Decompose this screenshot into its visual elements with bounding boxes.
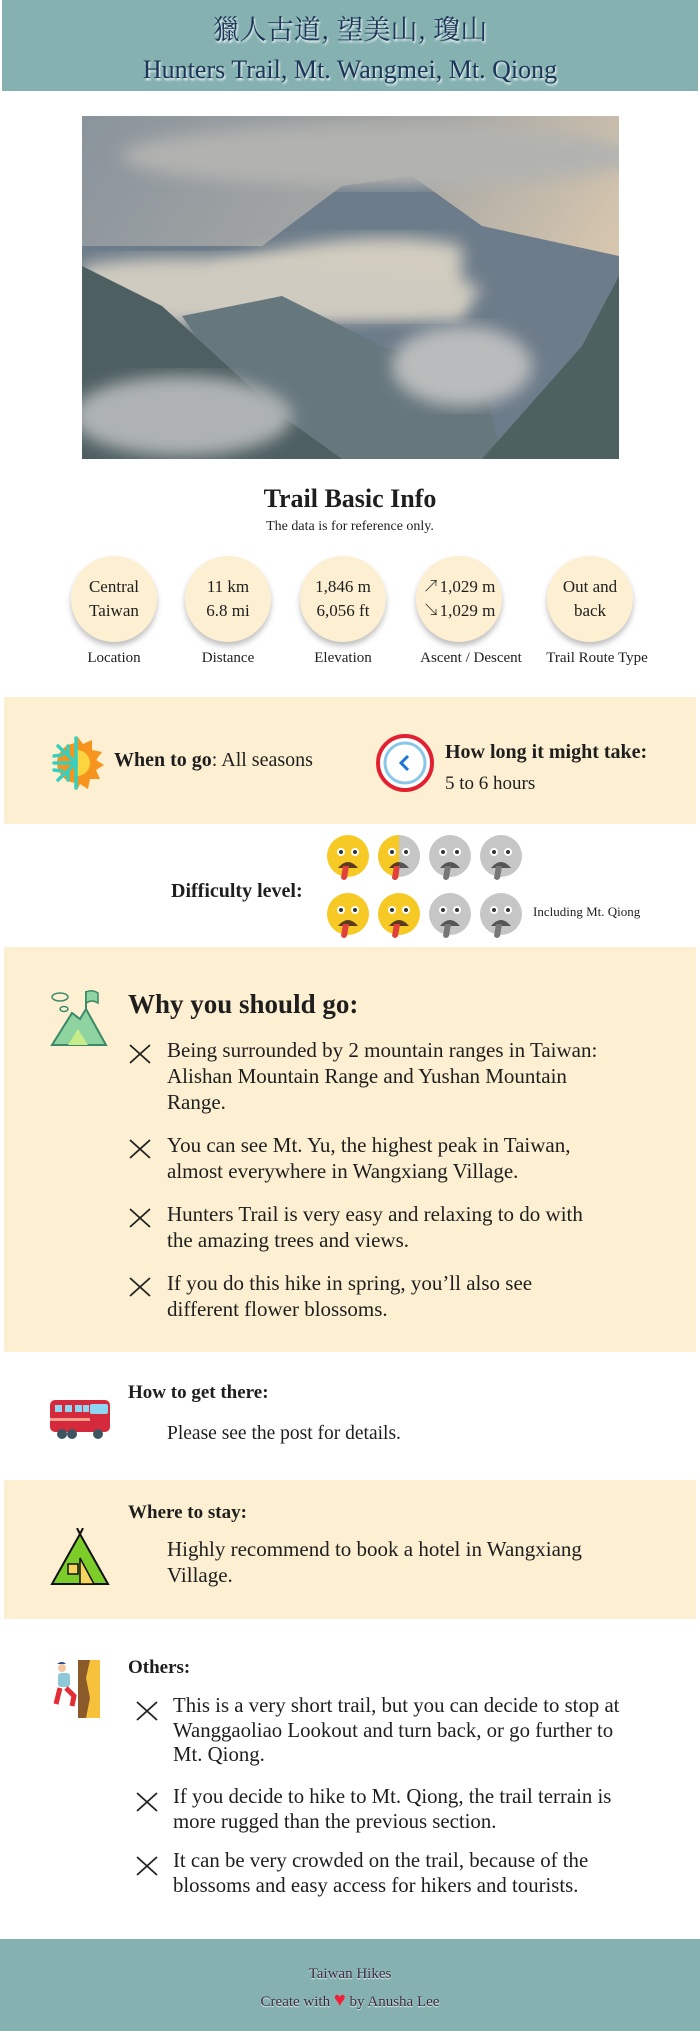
bullet list: Hunters Trail is very easy and relaxing to do with	[167, 1202, 583, 1226]
text: Ascent / Descent	[420, 650, 522, 666]
subtitle: The data is for reference only.	[266, 519, 434, 534]
title english: Hunters Trail, Mt. Wangmei, Mt. Qiong	[143, 55, 557, 84]
text: stay: Village.	[167, 1563, 233, 1587]
stat circles	[68, 556, 636, 649]
icon: tent	[50, 1528, 110, 1585]
text: stay: Highly recommend to book a hotel in Wangxiang	[167, 1537, 582, 1561]
circle: distance	[185, 556, 271, 642]
others list	[136, 1694, 620, 1896]
text: transport: Please see the post for details.	[167, 1423, 401, 1444]
bullet list: almost everywhere in Wangxiang Village.	[167, 1159, 518, 1183]
bullet list: the amazing trees and views.	[167, 1228, 409, 1252]
others list: If you decide to hike to Mt. Qiong, the trail terrain is	[173, 1785, 611, 1808]
panel: why you should go	[4, 947, 696, 1352]
circle: location	[71, 556, 157, 642]
others list: This is a very short trail, but you can decide to stop at	[173, 1694, 619, 1717]
circle: route type: Out and	[563, 577, 617, 596]
difficulty label: Difficulty level:	[171, 880, 303, 902]
footer	[0, 1939, 700, 2031]
header	[2, 0, 698, 91]
text: how long: How long it might take:	[445, 741, 647, 763]
panel: where to stay	[4, 1480, 696, 1619]
text: stay	[167, 1537, 582, 1587]
title chinese: 獵人古道, 望美山, 瓊山	[213, 8, 487, 47]
circle: distance: 6.8 mi	[206, 601, 250, 620]
circle: ascent: ↗1,029 m	[423, 577, 495, 596]
footer: Create with ♥ by Anusha Lee	[261, 1989, 439, 2011]
icon: climber	[54, 1660, 100, 1718]
heading: trail basic info: Trail Basic Info	[264, 484, 436, 513]
others list: Wanggaoliao Lookout and turn back, or go further to	[173, 1718, 613, 1742]
bullet list: Range.	[167, 1090, 226, 1114]
circle: elevation: 1,846 m	[315, 577, 371, 596]
others list: more rugged than the previous section.	[173, 1810, 496, 1832]
circle: location: Taiwan	[89, 601, 139, 620]
heading: others: Others:	[128, 1657, 190, 1678]
bullet list: Being surrounded by 2 mountain ranges in Taiwan:	[167, 1038, 597, 1062]
bullet list: You can see Mt. Yu, the highest peak in Taiwan,	[167, 1133, 571, 1157]
circle: ascent	[416, 556, 502, 642]
circle: route type	[547, 556, 633, 642]
text: Trail Route Type	[546, 650, 648, 666]
others list: It can be very crowded on the trail, because of the	[173, 1849, 588, 1872]
bullet list	[129, 1038, 597, 1321]
text: blossoms and easy access for hikers and tourists.	[173, 1874, 578, 1896]
bullet list: different flower blossoms.	[167, 1297, 388, 1321]
circle: ascent: ↘1,029 m	[423, 601, 495, 620]
icon: mountain flag	[50, 990, 108, 1046]
bullet list: Alishan Mountain Range and Yushan Mountain	[167, 1064, 567, 1088]
panel: when / how long: 5 to 6 hours	[445, 773, 535, 794]
icon: season	[52, 736, 104, 790]
note: including mt qiong: Including Mt. Qiong	[533, 904, 640, 919]
text: when to go: When to go: All seasons	[114, 749, 313, 771]
photo	[82, 116, 619, 459]
text: Elevation	[314, 650, 372, 666]
circle: elevation: 6,056 ft	[317, 601, 369, 620]
difficulty faces	[327, 835, 522, 938]
icon: bus	[50, 1400, 110, 1439]
circle: elevation	[300, 556, 386, 642]
circle: route type: back	[574, 601, 606, 620]
panel: when / how long	[4, 697, 696, 824]
circle: location: Central	[89, 577, 139, 596]
heading: why you should go: Why you should go:	[128, 989, 358, 1019]
heading: where to stay: Where to stay:	[128, 1502, 247, 1523]
footer: Taiwan Hikes	[309, 1966, 391, 1982]
bullet list: If you do this hike in spring, you’ll also see	[167, 1271, 532, 1295]
labels: Location	[87, 650, 141, 666]
circle: distance: 11 km	[207, 577, 249, 596]
text: Distance	[202, 650, 254, 666]
icon: clock	[376, 734, 434, 792]
heading: how to get there: How to get there:	[128, 1382, 269, 1403]
others list: Mt. Qiong.	[173, 1743, 265, 1766]
